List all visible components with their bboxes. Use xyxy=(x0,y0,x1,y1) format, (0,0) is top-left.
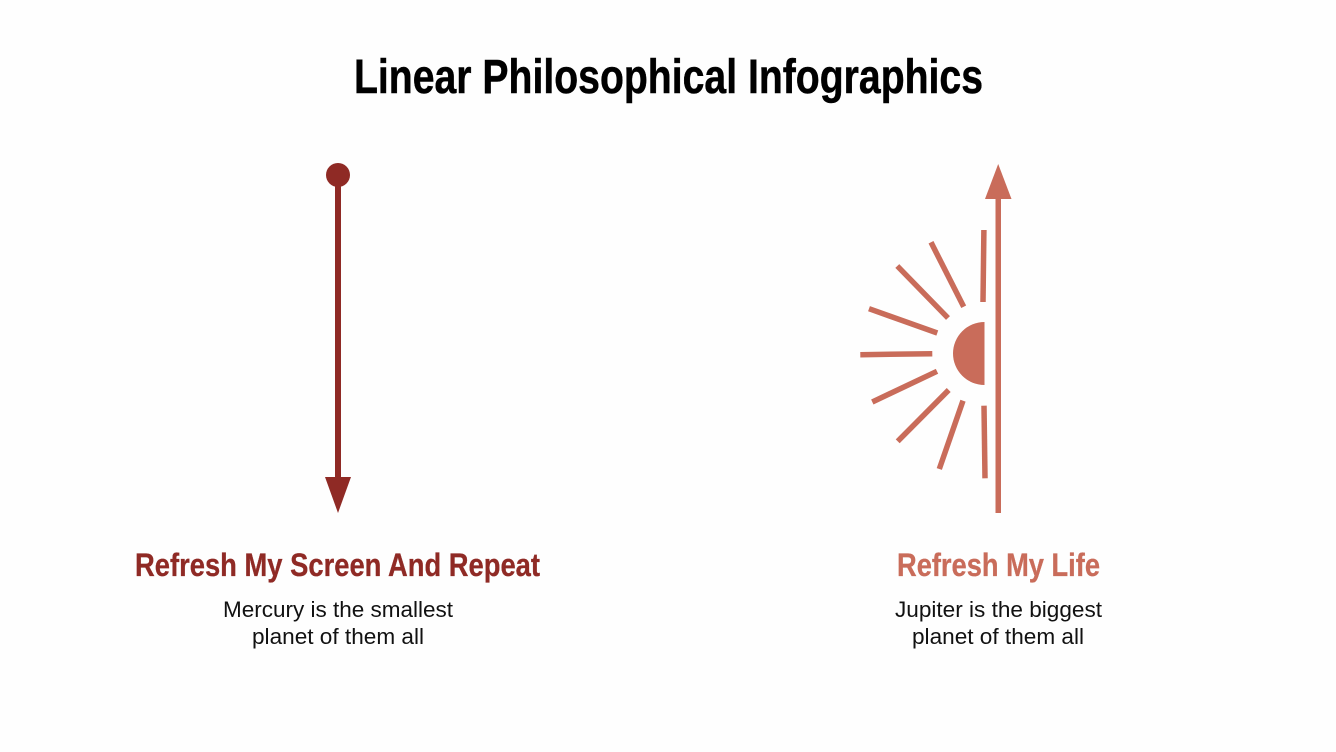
text block: left: Mercury is the smallest xyxy=(223,597,453,622)
icon: half sun with rays xyxy=(860,230,985,478)
text block: right xyxy=(895,597,1102,649)
arrow: upward line xyxy=(985,164,1012,513)
title: Linear Philosophical Infographics xyxy=(354,51,983,104)
panel: right column xyxy=(860,164,1102,649)
heading: right: Refresh My Life xyxy=(897,547,1100,583)
text block: right: planet of them all xyxy=(912,624,1084,649)
arrow: downward line with dot xyxy=(325,163,351,513)
heading: left: Refresh My Screen And Repeat xyxy=(135,547,540,583)
text block: left xyxy=(223,597,453,649)
panel: left column xyxy=(135,163,540,649)
text block: left: planet of them all xyxy=(252,624,424,649)
text block: right: Jupiter is the biggest xyxy=(895,597,1102,622)
